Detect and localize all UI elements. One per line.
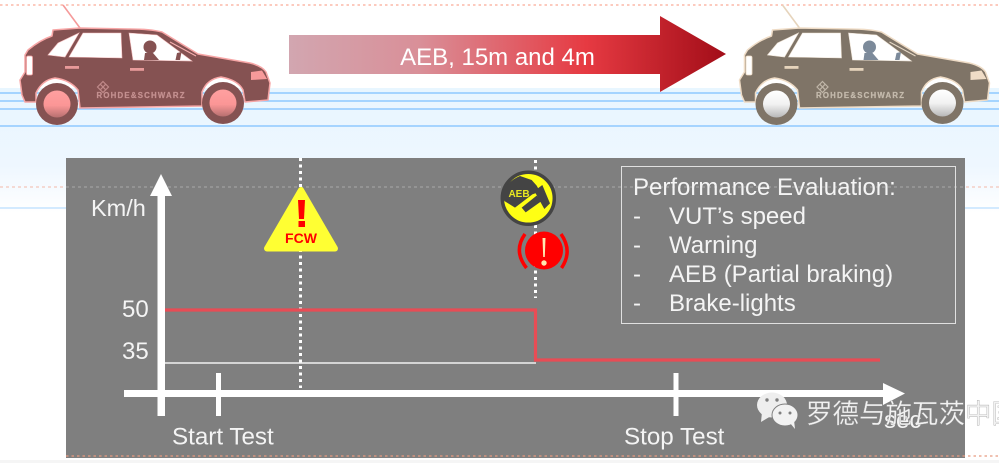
- car: neutral vehicle after the test: ROHDE&SCHWARZ: [816, 91, 904, 100]
- icon: WeChat bubbles: [757, 392, 798, 429]
- arrow: AEB, 15m and 4m: AEB, 15m and 4m: [400, 44, 595, 71]
- axis: time arrow: [124, 383, 905, 405]
- callout: performance evaluation: [622, 166, 956, 324]
- icon: FCW warning triangle: [267, 190, 335, 248]
- tick: start: [216, 373, 221, 416]
- icon: AEB hammer badge: AEB: [508, 189, 530, 200]
- axis value: 50: 50: [122, 296, 149, 323]
- callout: performance evaluation: VUT’s speed: [669, 203, 806, 230]
- callout: performance evaluation: AEB (Partial braking): [669, 261, 893, 288]
- axis label: Km/h: Km/h: [91, 195, 146, 221]
- marker: AEB dotted line: [534, 160, 537, 298]
- car: red tinted vehicle before the test: [20, 5, 270, 125]
- car: neutral vehicle after the test: [740, 5, 990, 125]
- panel: speed chart: [66, 158, 999, 458]
- axis value: 35: 35: [122, 338, 149, 365]
- marker: FCW dotted line: [299, 158, 302, 388]
- axis: speed arrow: [150, 174, 172, 416]
- icon: red brake warning: [519, 232, 567, 270]
- icon: AEB hammer badge: [502, 172, 554, 224]
- car: red tinted vehicle before the test: ROHDE&SCHWARZ: [96, 91, 185, 100]
- callout: performance evaluation: -: [633, 232, 641, 259]
- tick: stop: [674, 373, 678, 416]
- callout: performance evaluation: Performance Evaluation:: [633, 174, 896, 201]
- callout: performance evaluation: -: [633, 290, 641, 317]
- line: VUT speed profile: [165, 310, 880, 360]
- arrow: AEB, 15m and 4m: [289, 16, 726, 92]
- callout: performance evaluation: Warning: [669, 232, 757, 259]
- callout: performance evaluation: Brake-lights: [669, 290, 796, 317]
- line: target speed 35: [165, 362, 536, 364]
- axis label: sec: sec: [884, 407, 921, 434]
- label: Stop Test: Stop Test: [624, 424, 725, 450]
- callout: performance evaluation: -: [633, 261, 641, 288]
- label: Start Test: Start Test: [172, 424, 274, 450]
- callout: performance evaluation: -: [633, 203, 641, 230]
- icon: FCW warning triangle: FCW: [285, 230, 318, 246]
